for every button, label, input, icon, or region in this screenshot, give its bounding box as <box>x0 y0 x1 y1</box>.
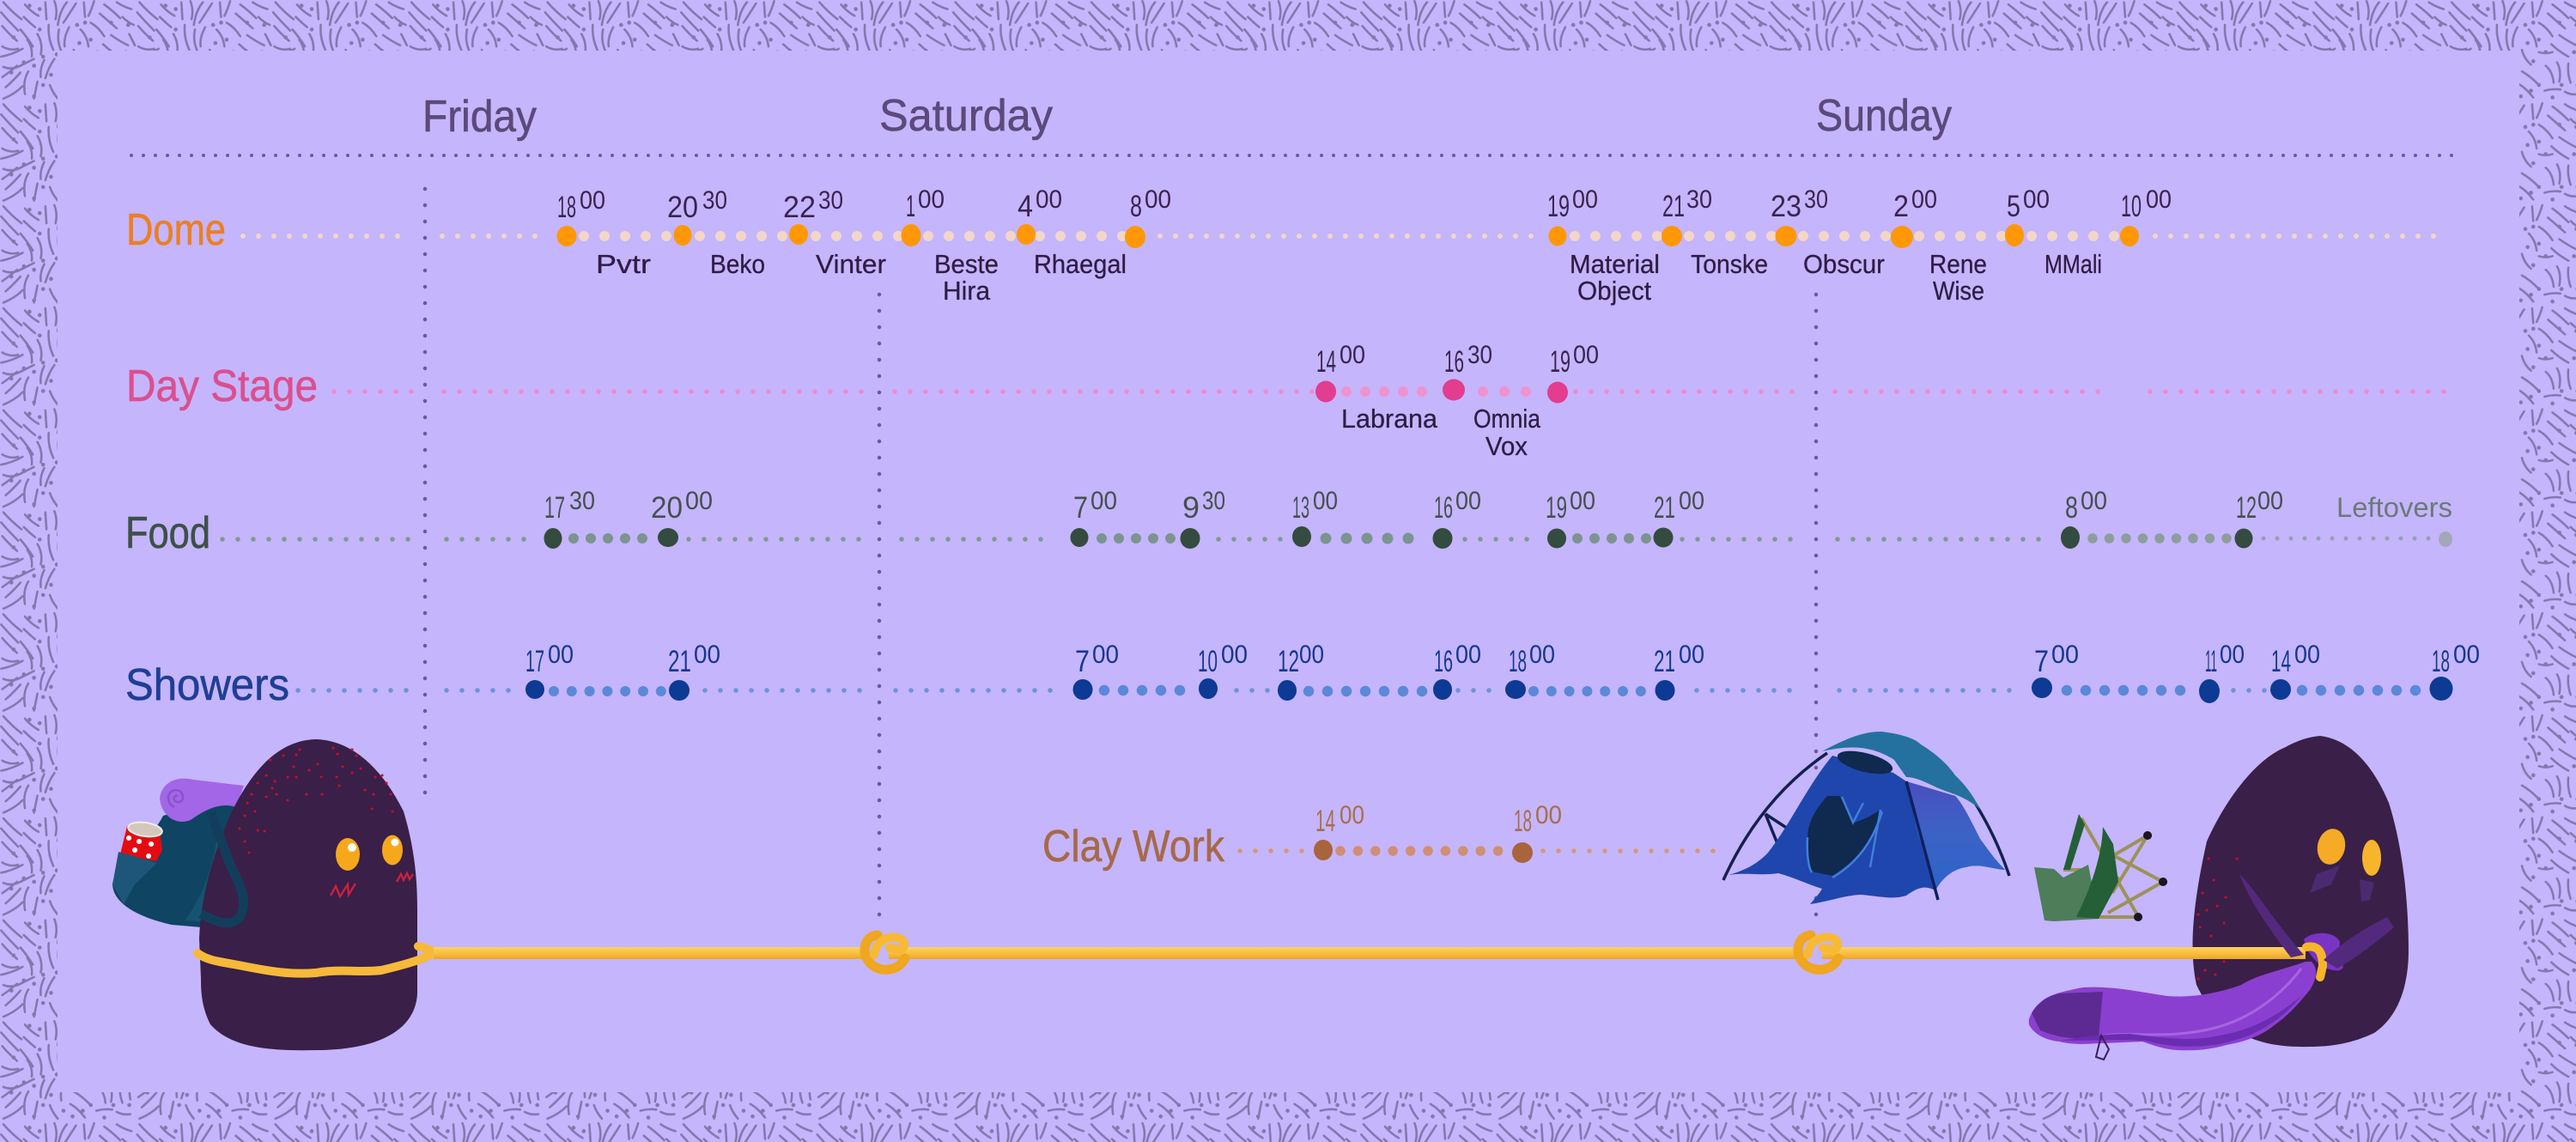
body <box>199 739 417 1050</box>
time labels: Dome: 30 <box>702 186 727 215</box>
eye <box>2362 840 2381 876</box>
side panel <box>1906 781 2005 890</box>
bag body <box>2029 962 2316 1050</box>
time labels: Showers: 00 <box>1529 641 1555 669</box>
artist names: Dome: Material <box>1570 249 1660 279</box>
artist names: Dome: Tonske <box>1691 249 1768 279</box>
time labels: Clay Work: 00 <box>1535 801 1562 829</box>
time labels: Food: 7 <box>1073 491 1088 525</box>
backpack strap <box>201 811 244 923</box>
time labels: Showers: 00 <box>1679 641 1704 669</box>
label: Clay Work: Clay Work <box>1042 822 1225 872</box>
mug <box>120 820 163 861</box>
time nodes: Clay Work <box>1314 840 1533 863</box>
time labels: Dome: 18 <box>557 191 576 224</box>
eye <box>2314 826 2348 867</box>
time labels: Showers: 12 <box>1278 645 1299 678</box>
time nodes: Day Stage <box>1315 380 1568 404</box>
day header row <box>422 91 1952 142</box>
bag zipper loop <box>2096 1036 2109 1060</box>
time labels: Day Stage: 16 <box>1444 345 1464 379</box>
heading: Sunday: Sunday <box>1816 91 1952 141</box>
time labels: Showers: 00 <box>1299 641 1324 669</box>
legs <box>2063 818 2163 917</box>
label: Dome: Dome <box>126 205 226 255</box>
time labels: Day Stage: 30 <box>1467 341 1492 369</box>
time labels: Food: 19 <box>1546 491 1567 525</box>
artist names: Dome: Rhaegal <box>1034 249 1127 279</box>
time labels: Food <box>544 487 2283 525</box>
artist names: Day Stage <box>1341 404 1541 461</box>
body <box>2193 736 2409 1047</box>
label: Leftovers: Leftovers <box>2336 492 2452 523</box>
illustration: left character with backpack <box>112 739 434 1050</box>
time labels: Showers <box>526 641 2480 678</box>
time labels: Food: 00 <box>1091 487 1117 515</box>
illustration: right character <box>2193 736 2409 1047</box>
time labels: Showers: 21 <box>668 645 691 678</box>
time labels: Dome: 00 <box>2023 185 2050 214</box>
artist names: Dome: Obscur <box>1803 249 1885 279</box>
time labels: Clay Work <box>1315 801 1562 838</box>
time labels: Dome: 10 <box>2121 190 2142 223</box>
time labels: Dome: 30 <box>818 186 843 215</box>
time labels: Food: 00 <box>2081 487 2107 515</box>
time labels: Showers: 18 <box>2432 645 2450 678</box>
door <box>1807 796 1880 876</box>
time labels: Food: 8 <box>2065 491 2078 525</box>
time labels: Showers: 16 <box>1434 645 1453 678</box>
time labels: Day Stage <box>1316 341 1599 379</box>
artist names: Dome: Pvtr <box>596 249 651 279</box>
red speckles <box>2198 859 2237 979</box>
row: Food <box>125 487 2452 558</box>
label: Showers: Showers <box>125 660 289 710</box>
artist names: Dome: Rene <box>1929 249 1987 279</box>
time labels: Showers: 00 <box>2294 641 2320 669</box>
time labels: Dome: 00 <box>1036 185 1062 214</box>
backpack <box>112 799 253 929</box>
time labels: Dome: 00 <box>2146 185 2172 214</box>
time labels: Food: 30 <box>1202 487 1225 515</box>
time labels: Showers: 14 <box>2271 645 2291 678</box>
row: Showers <box>125 641 2480 710</box>
time labels: Dome: 20 <box>667 191 698 224</box>
time labels: Dome: 23 <box>1771 190 1801 223</box>
artist names: Dome: Hira <box>943 276 991 306</box>
bag lower shadow <box>2061 996 2301 1047</box>
flysheet <box>1822 732 1980 810</box>
artist names: Dome: Beste <box>934 249 999 279</box>
rope around waist <box>197 946 434 974</box>
bag flap <box>2032 992 2103 1039</box>
heading: Friday: Friday <box>422 92 537 142</box>
time labels: Dome <box>557 185 2172 224</box>
backpack pocket <box>112 852 157 904</box>
time nodes: Showers <box>526 677 2452 703</box>
time labels: Dome: 1 <box>906 190 915 223</box>
camping chair <box>2034 814 2163 921</box>
time labels: Dome: 4 <box>1018 190 1033 223</box>
rope end ring <box>2306 947 2323 977</box>
time labels: Showers: 17 <box>526 645 544 678</box>
tent drapes <box>1807 797 1882 878</box>
time labels: Showers: 10 <box>1198 645 1218 678</box>
time labels: Food: 9 <box>1182 491 1200 525</box>
time labels: Clay Work: 00 <box>1340 801 1364 829</box>
time labels: Day Stage: 00 <box>1573 341 1599 369</box>
side fabric <box>2076 827 2118 919</box>
artist names: Dome <box>596 249 2102 306</box>
vent <box>1835 746 1895 779</box>
time labels: Dome: 19 <box>1547 190 1570 223</box>
label: Food: Food <box>125 508 210 558</box>
inner tent <box>1728 756 2005 904</box>
heading: Saturday: Saturday <box>879 91 1053 141</box>
time labels: Food: 00 <box>1455 487 1481 515</box>
eye <box>336 838 360 871</box>
artist names: Dome: MMali <box>2044 249 2102 279</box>
row: Dome <box>126 185 2445 306</box>
red speckles <box>240 748 392 853</box>
eye <box>382 835 403 866</box>
artist names: Day Stage: Omnia <box>1473 404 1541 434</box>
artist names: Dome: Beko <box>710 249 765 279</box>
time labels: Food: 16 <box>1434 491 1453 525</box>
sleeping bag <box>2029 874 2394 1060</box>
time labels: Showers: 00 <box>2220 641 2245 669</box>
seat fabric <box>2034 865 2099 921</box>
time nodes: Food <box>544 526 2253 549</box>
rope <box>434 935 2323 977</box>
time labels: Showers: 00 <box>548 641 574 669</box>
time labels: Food: 12 <box>2236 491 2257 525</box>
time labels: Showers: 00 <box>1455 641 1481 669</box>
centre pole <box>1906 781 1938 900</box>
time labels: Showers: 00 <box>694 641 720 669</box>
time labels: Food: 17 <box>544 491 565 525</box>
time labels: Dome: 2 <box>1893 190 1909 223</box>
rope knot: Sunday <box>1798 935 1838 969</box>
time labels: Food: 21 <box>1654 491 1675 525</box>
time nodes: Dome <box>556 224 2139 248</box>
time labels: Showers: 18 <box>1509 645 1527 678</box>
time labels: Showers: 00 <box>1092 641 1119 669</box>
time labels: Day Stage: 19 <box>1550 345 1571 379</box>
artist names: Day Stage: Vox <box>1485 431 1528 461</box>
time labels: Showers: 7 <box>2034 645 2049 678</box>
artist names: Day Stage: Labrana <box>1341 404 1438 434</box>
artist names: Dome: Wise <box>1933 276 1984 306</box>
time labels: Showers: 11 <box>2205 645 2217 678</box>
time labels: Dome: 00 <box>1572 185 1598 214</box>
time labels: Food: 00 <box>685 487 713 515</box>
artist names: Dome: Vinter <box>816 249 886 279</box>
time labels: Dome: 5 <box>2007 190 2020 223</box>
time labels: Dome: 21 <box>1662 190 1685 223</box>
bag bunch behind rope <box>2304 933 2343 970</box>
time labels: Showers: 7 <box>1075 645 1090 678</box>
time labels: Showers: 00 <box>1221 641 1248 669</box>
poles <box>1723 753 2009 880</box>
time labels: Dome: 22 <box>783 191 816 224</box>
time labels: Dome: 00 <box>580 186 605 215</box>
time labels: Food: 00 <box>2257 487 2283 515</box>
time labels: Dome: 00 <box>1145 185 1171 214</box>
time labels: Dome: 30 <box>1686 185 1712 214</box>
time labels: Dome: 30 <box>1804 185 1828 214</box>
time labels: Dome: 8 <box>1130 190 1142 223</box>
tent <box>1723 732 2009 904</box>
bedroll <box>160 779 244 822</box>
time labels: Clay Work: 14 <box>1315 805 1335 838</box>
time labels: Food: 00 <box>1313 487 1338 515</box>
row: Day Stage <box>126 341 2446 461</box>
time labels: Clay Work: 18 <box>1514 805 1532 838</box>
bag edge highlight <box>2099 969 2301 1036</box>
time labels: Day Stage: 14 <box>1316 345 1336 379</box>
blush <box>331 873 413 896</box>
back fabric <box>2063 814 2085 870</box>
time labels: Showers: 00 <box>2051 641 2079 669</box>
end node: Leftovers <box>2439 532 2452 547</box>
time labels: Food: 20 <box>651 491 683 525</box>
cheek shadows <box>2310 866 2374 902</box>
rope knot: Saturday <box>865 935 905 969</box>
time labels: Dome: 00 <box>1911 185 1937 214</box>
arms <box>2239 874 2394 969</box>
time labels: Food: 30 <box>569 487 595 515</box>
feet <box>2138 835 2163 917</box>
time labels: Showers: 21 <box>1654 645 1675 678</box>
row: Clay Work <box>1042 801 1716 872</box>
artist names: Dome: Object <box>1577 276 1651 306</box>
time labels: Dome: 00 <box>918 185 945 214</box>
time labels: Food: 00 <box>1570 487 1595 515</box>
time labels: Showers: 00 <box>2453 641 2480 669</box>
time labels: Day Stage: 00 <box>1340 341 1365 369</box>
label: Day Stage: Day Stage <box>126 361 318 411</box>
time labels: Food: 13 <box>1292 491 1309 525</box>
time labels: Food: 00 <box>1679 487 1704 515</box>
